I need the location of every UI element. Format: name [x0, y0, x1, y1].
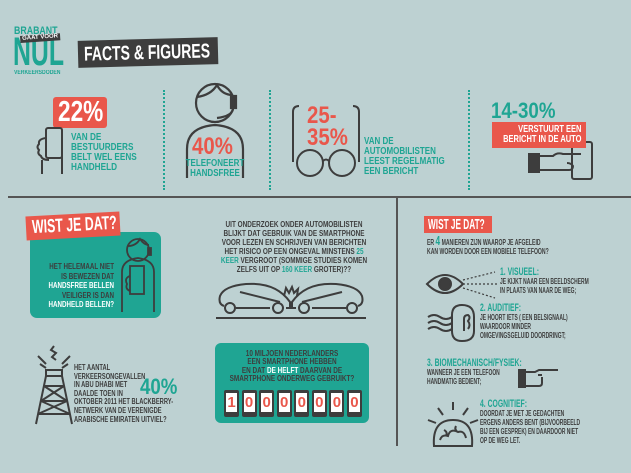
digit phones: 0 [280, 394, 288, 411]
icon: tower [35, 345, 73, 424]
digit phones: 0 [262, 394, 271, 411]
text: research [221, 220, 367, 274]
callout: VERSTUURT EEN [518, 124, 581, 135]
stat 22% [36, 96, 137, 174]
icon: ear [428, 304, 475, 342]
text: HANDHELD BELLEN? [48, 300, 114, 309]
icon: phone in hand [36, 127, 63, 174]
stat 25-35% [292, 102, 445, 177]
text: research: ZELFS UIT OP 160 KEER GROTER)?? [237, 265, 351, 274]
digit phones [224, 390, 362, 417]
item 4: BIJ EEN GESPREK) EN DAARDOOR NIET [480, 427, 578, 436]
stat 25-35%: VAN DE [364, 136, 394, 147]
item 3: 3. BIOMECHANISCH/FYSIEK: [427, 357, 522, 369]
text [48, 262, 114, 309]
logo: BRABANT [14, 25, 58, 37]
text: abu dhabi: VERKEERSONGEVALLEN [74, 372, 145, 381]
digit phones: 0 [333, 394, 341, 411]
icon: pointing hand [518, 369, 558, 388]
text: research: KEER VERGROOT (SOMMIGE STUDIES KOMEN [221, 256, 367, 265]
panel: 10 miljoen [215, 343, 369, 423]
text: abu dhabi [74, 363, 173, 424]
text: abu dhabi: ARABISCHE EMIRATEN UITVIEL? [74, 415, 167, 424]
teal box [30, 232, 161, 318]
item 4 [480, 398, 580, 445]
item 4: OP DE WEG LET. [480, 436, 520, 445]
callout [492, 122, 586, 148]
text: research: UIT ONDERZOEK ONDER AUTOMOBILISTEN [226, 220, 362, 229]
stat 14-30% [491, 98, 593, 180]
icon: headset person [186, 82, 244, 178]
digit phones: 1 [227, 394, 236, 411]
item 2: 2. AUDITIEF: [480, 302, 521, 314]
stat 40%: TELEFONEERT [186, 158, 244, 169]
callout 22%: 22% [58, 96, 103, 128]
callout: BERICHT IN DE AUTO [503, 134, 581, 145]
text: abu dhabi: DAALDE TOEN IN [74, 389, 123, 398]
text: HET HELEMAAL NIET [49, 262, 114, 271]
stat 40%: 40% [192, 133, 233, 160]
stat 14-30%: 14-30% [491, 98, 555, 123]
text: abu dhabi: IN ABU DHABI MET [74, 380, 127, 389]
item 1: IN PLAATS VAN NAAR DE WEG; [500, 286, 576, 295]
item 4: ERGENS ANDERS BENT (BIJVOORBEELD [480, 418, 580, 427]
item 1: JE KIJKT NAAR EEN BEELDSCHERM [500, 277, 589, 286]
text: research: VOOR LEZEN EN SCHRIJVEN VAN BERICHTEN [222, 238, 366, 247]
stat 25-35%: 25- [307, 102, 336, 129]
digit phones: 0 [350, 394, 359, 411]
icon: glasses [292, 105, 360, 177]
logo: VERKEERSDODEN [14, 70, 60, 76]
text: BELT WEL EENS [71, 152, 137, 163]
text: IS BEWEZEN DAT [61, 272, 114, 280]
text: research: BLIJKT DAT GEBRUIK VAN DE SMARTPHONE [224, 229, 364, 238]
panel: 10 miljoen: EN DAT DE HELFT DAARVAN DE [242, 366, 342, 375]
stat 40% [186, 82, 244, 179]
intro [427, 233, 549, 256]
stat 40%: HANDSFREE [190, 168, 240, 179]
heading: WIST JE DAT? [31, 213, 117, 238]
digit phones: 0 [298, 394, 306, 411]
icon: brain [428, 402, 478, 447]
panel: 10 miljoen: 10 MILJOEN NEDERLANDERS [246, 349, 338, 358]
text: HANDSFREE BELLEN [48, 281, 114, 290]
text: 40% [140, 374, 177, 399]
item 2: OMGEVINGSGELUID DOORDRINGT; [480, 331, 566, 340]
icon: hand with phone [528, 141, 593, 180]
panel: 10 miljoen: EEN SMARTPHONE HEBBEN [247, 357, 337, 366]
digit phones: 0 [245, 394, 253, 411]
item 3: WANNEER JE EEN TELEFOON [427, 368, 500, 377]
digit phones: 0 [315, 394, 323, 411]
logo: NUL [13, 30, 64, 74]
intro: ER 4 MANIEREN ZIJN WAAROP JE AFGELEID [427, 233, 541, 248]
icon: person with phone [121, 237, 155, 312]
heading: WIST JE DAT? [428, 216, 485, 233]
item 4: 4. COGNITIEF: [480, 398, 527, 410]
text: abu dhabi: OKTOBER 2011 HET BLACKBERRY- [74, 397, 173, 406]
text: abu dhabi: NETWERK VAN DE VERENIGDE [74, 406, 162, 415]
panel: wist je dat right [424, 216, 589, 447]
stat 25-35%: 35% [307, 124, 348, 151]
item 1 [500, 266, 589, 295]
icon: car crash [216, 282, 366, 319]
intro: KAN WORDEN DOOR EEN MOBIELE TELEFOON? [427, 247, 549, 256]
text: HANDHELD [71, 162, 117, 173]
item 4: DOORDAT JE MET JE GEDACHTEN [480, 409, 564, 418]
item 3: HANDMATIG BEDIENT; [427, 377, 481, 386]
icon: eye [426, 271, 497, 299]
item 2: WAARDOOR MINDER [480, 322, 531, 331]
text [71, 132, 137, 173]
stat 25-35%: EEN BERICHT [364, 166, 418, 177]
text: VAN DE [71, 132, 101, 143]
text: VEILIGER IS DAN [62, 290, 114, 300]
panel: 10 miljoen: SMARTPHONE ONDERWEG GEBRUIKT? [230, 374, 354, 383]
item 2: JE HOORT IETS ( EEN BELSIGNAAL) [480, 313, 568, 322]
dividers [163, 90, 165, 190]
title: FACTS & FIGURES [84, 40, 210, 66]
stat 25-35%: LEEST REGELMATIG [364, 156, 445, 167]
logo: GAAT VOOR [22, 33, 58, 42]
item 3 [427, 357, 522, 386]
item 1: 1. VISUEEL: [500, 266, 539, 278]
stat 25-35%: AUTOMOBILISTEN [364, 146, 436, 157]
text: BESTUURDERS [71, 142, 133, 153]
text: abu dhabi: HET AANTAL [74, 363, 110, 372]
panel: wist je dat left [25, 212, 161, 318]
item 2 [480, 302, 568, 340]
text: research: HET RISICO OP EEN ONGEVAL MINSTENS 25 [224, 247, 364, 256]
